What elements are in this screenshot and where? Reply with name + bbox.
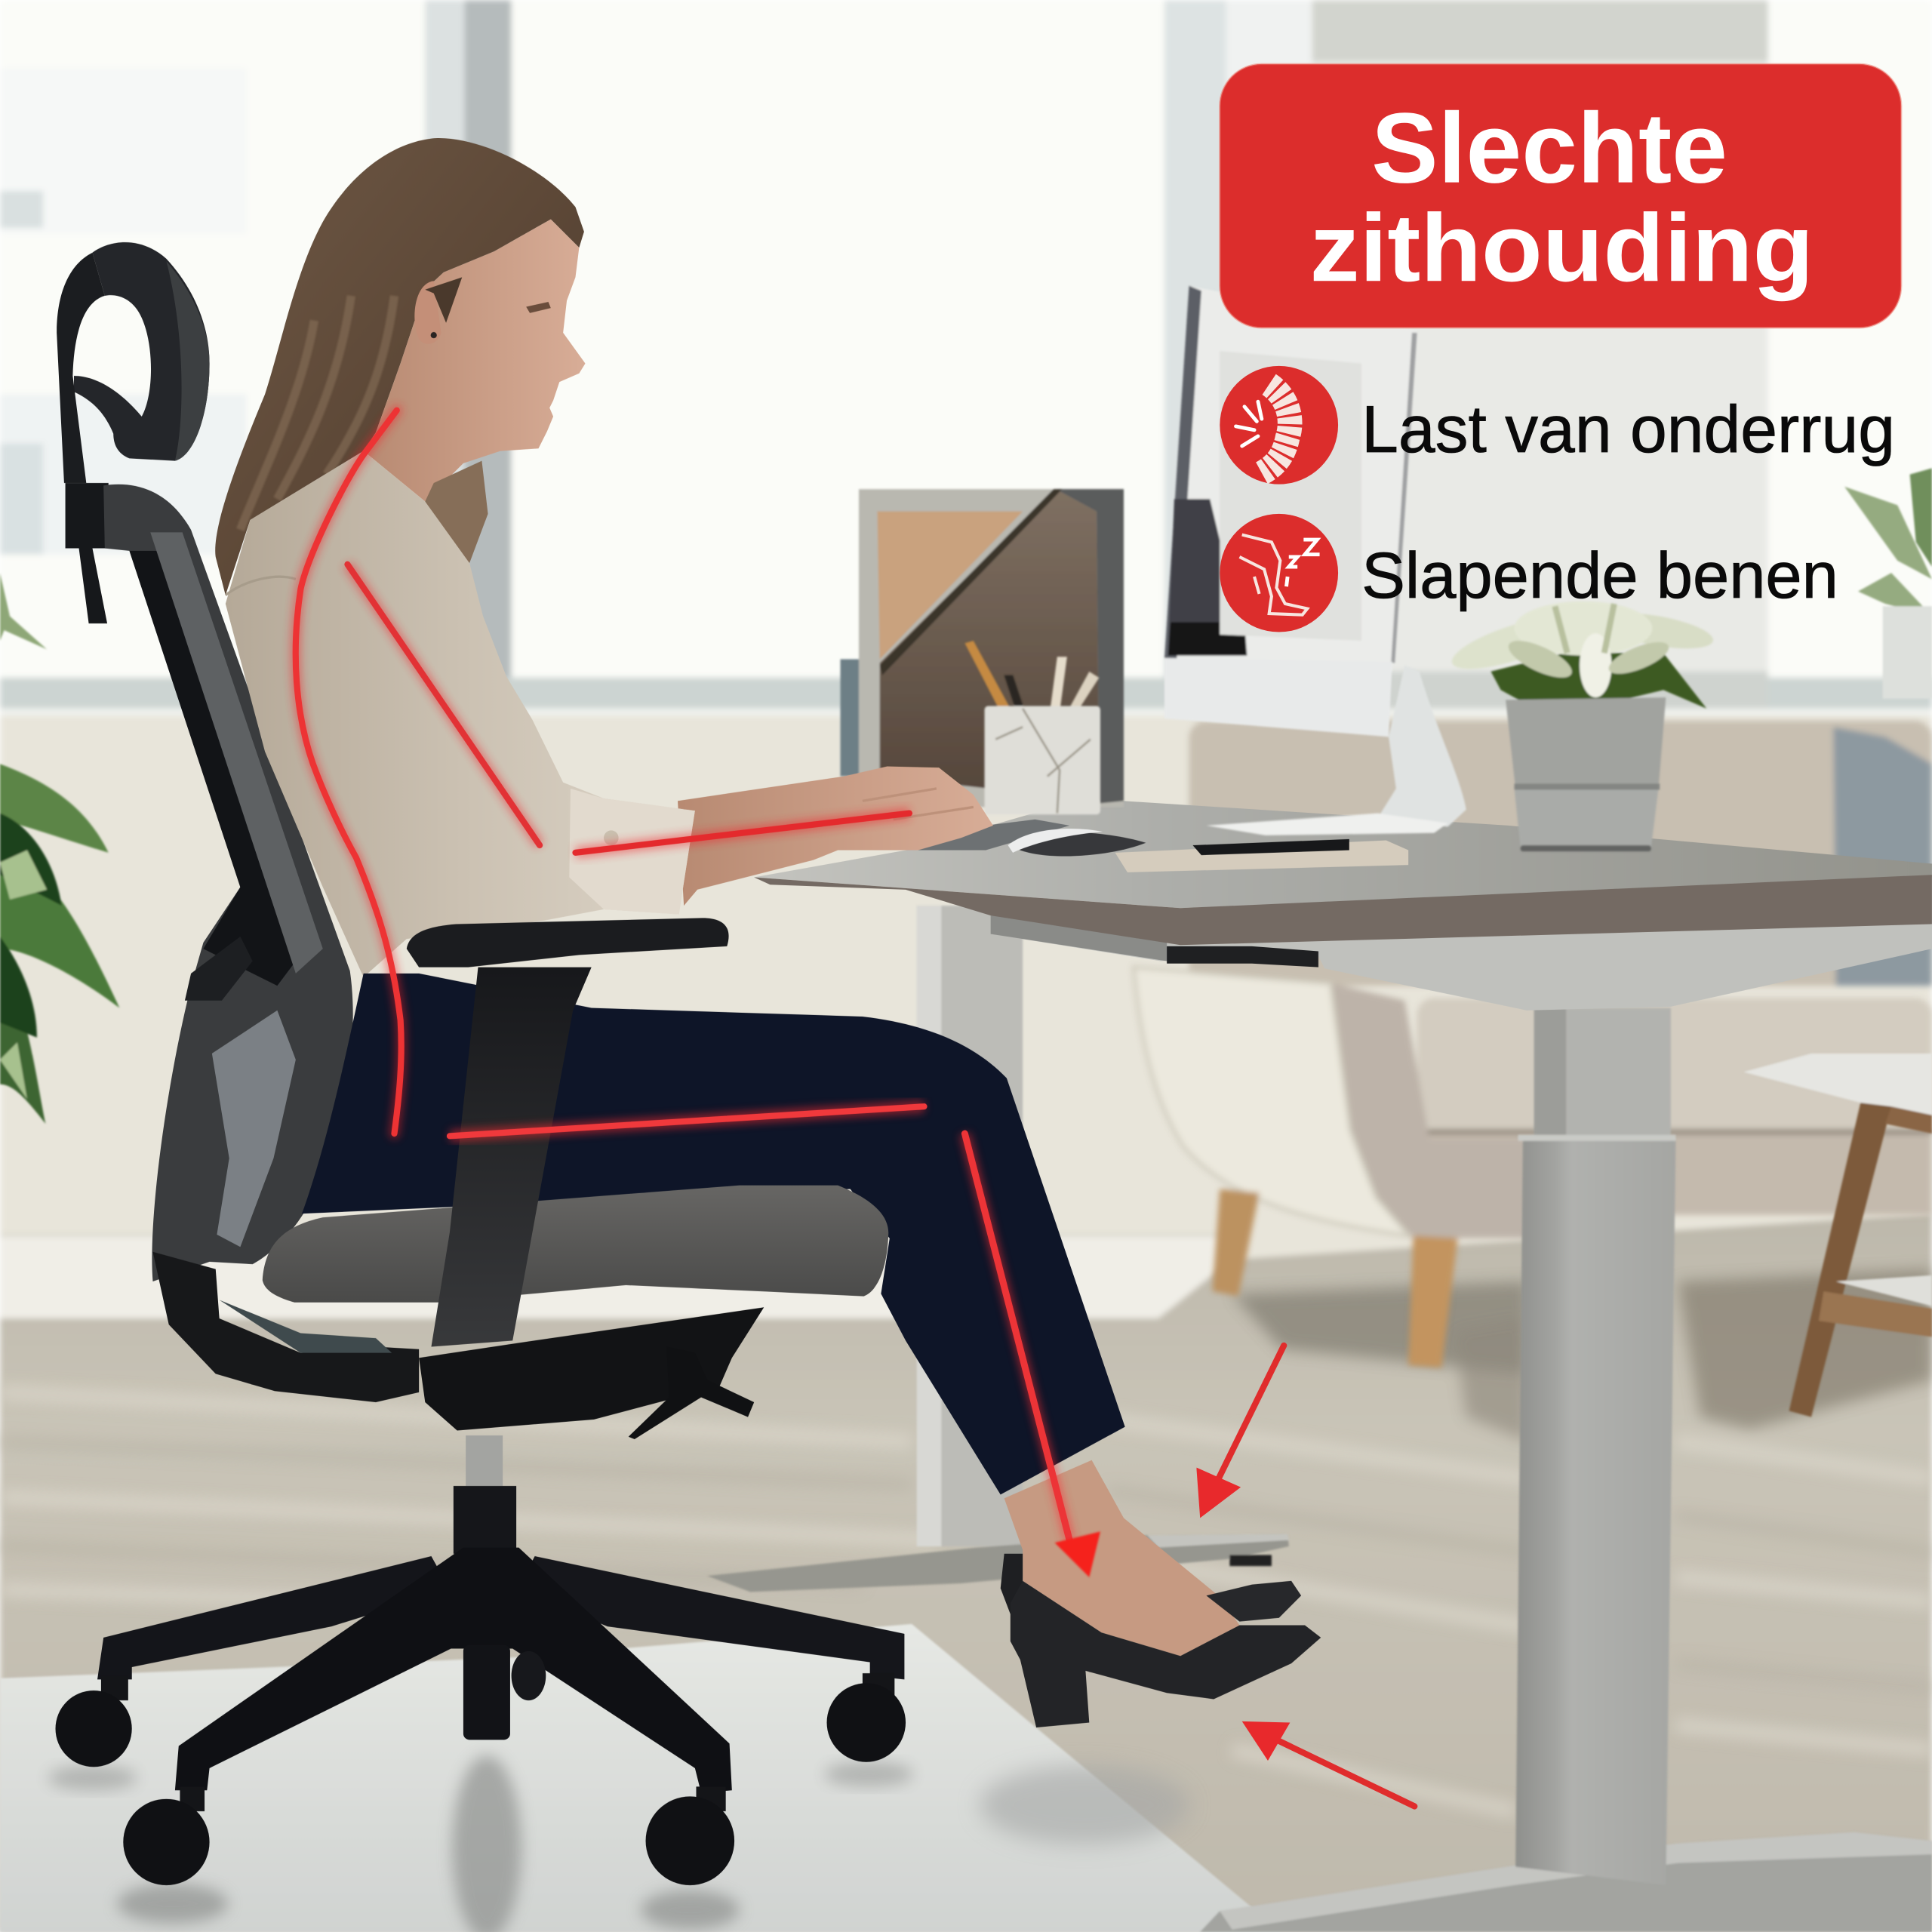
symptom: sleeping legs xyxy=(1220,514,1838,632)
desk items: keyboard, mouse, notebook, pen xyxy=(906,820,1408,872)
sofa and armchair xyxy=(1134,721,1932,1367)
woman: legs xyxy=(302,974,1239,1656)
chair: backrest xyxy=(103,485,353,1281)
woman: hair xyxy=(215,138,584,595)
heading line 1: Slechte xyxy=(1371,93,1727,205)
side table xyxy=(1743,1054,1932,1417)
plant: on desk xyxy=(1447,601,1715,851)
plant: right window xyxy=(1844,468,1932,699)
desk: top xyxy=(754,798,1932,1011)
posture line: spine xyxy=(296,411,401,1134)
arrow: toward feet from above xyxy=(1196,1346,1284,1518)
window frame bars xyxy=(425,0,465,690)
posture line: forearm xyxy=(575,814,909,853)
icon: spine xyxy=(1220,366,1338,485)
window sill xyxy=(0,678,1932,709)
desk: back leg and foot xyxy=(707,906,1289,1592)
plant: left xyxy=(0,573,119,1124)
posture arrow: lower leg xyxy=(964,1134,1100,1577)
woman: face and neck xyxy=(364,220,586,501)
heading line 2: zithouding xyxy=(1310,194,1814,301)
chair mat xyxy=(0,1624,1281,1932)
woman: blouse xyxy=(226,451,695,977)
posture line: upper arm xyxy=(347,565,540,845)
chair: gas lift and five-star base xyxy=(97,1435,904,1793)
file holder with documents xyxy=(840,489,1124,807)
floor planks xyxy=(0,1269,1932,1811)
chair: headrest xyxy=(57,242,210,623)
grey column xyxy=(1312,0,1768,62)
woman: forearm and hand xyxy=(678,767,993,906)
chair: seat mechanism and back support xyxy=(152,1252,764,1439)
floor xyxy=(0,1214,1932,1932)
symptom: lower back xyxy=(1220,366,1895,485)
icon: leg with zzz xyxy=(1220,514,1338,632)
woman: hair lock beside neck xyxy=(425,461,488,563)
chair: casters xyxy=(55,1673,906,1885)
posture line: thigh xyxy=(450,1106,924,1136)
window panes xyxy=(0,68,247,234)
chair: seat cushion xyxy=(263,1186,888,1303)
title badge xyxy=(1220,64,1901,328)
desk: front leg and foot xyxy=(1200,1008,1932,1932)
label: sleeping legs: Slapende benen xyxy=(1361,540,1838,612)
monitor xyxy=(1164,286,1466,835)
label: lower back: Last van onderrug xyxy=(1361,392,1895,466)
wall xyxy=(0,716,1932,1320)
woman: shoes xyxy=(1001,1554,1321,1727)
pen cup xyxy=(964,641,1100,814)
chair: armrest xyxy=(407,918,729,1346)
arrow: toward feet from below xyxy=(1242,1721,1414,1806)
